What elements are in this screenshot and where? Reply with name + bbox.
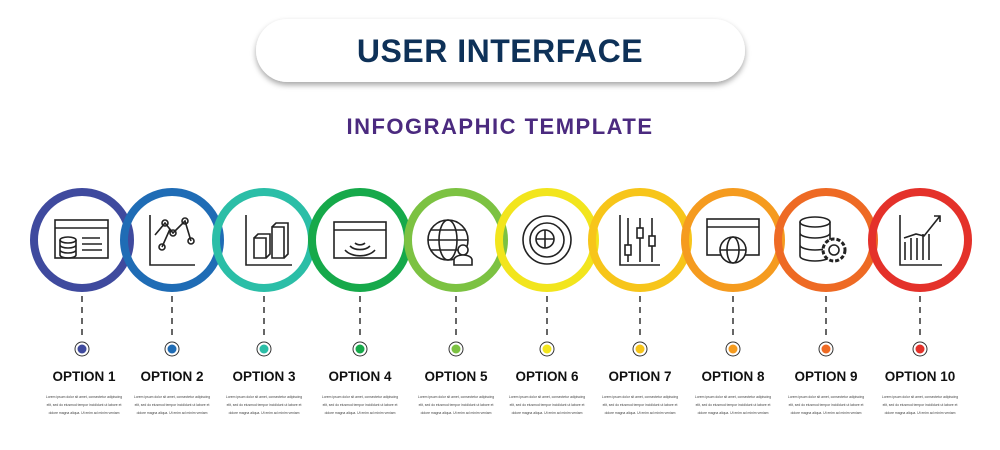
descriptions: dolore magna aliqua. Ut enim ad minim veniam <box>791 411 862 415</box>
icon: 3d bars <box>246 215 292 265</box>
descriptions: elit, sed do eiusmod tempor incididunt ut labore et <box>510 403 584 407</box>
descriptions: dolore magna aliqua. Ut enim ad minim veniam <box>229 411 300 415</box>
option labels <box>52 369 955 384</box>
descriptions: Lorem ipsum dolor sit amet, consectetur adipiscing <box>788 395 864 399</box>
connectors <box>82 296 920 338</box>
icon: browser database <box>55 220 108 258</box>
descriptions: dolore magna aliqua. Ut enim ad minim veniam <box>137 411 208 415</box>
descriptions: dolore magna aliqua. Ut enim ad minim veniam <box>605 411 676 415</box>
descriptions: dolore magna aliqua. Ut enim ad minim veniam <box>49 411 120 415</box>
option labels: OPTION 6 <box>515 369 579 384</box>
icons <box>55 215 942 265</box>
subtitle: INFOGRAPHIC TEMPLATE <box>346 114 654 139</box>
descriptions: elit, sed do eiusmod tempor incididunt ut labore et <box>419 403 493 407</box>
markers <box>75 342 927 356</box>
option labels: OPTION 7 <box>608 369 672 384</box>
icon: donut target <box>523 216 571 264</box>
option labels: OPTION 1 <box>52 369 116 384</box>
descriptions: elit, sed do eiusmod tempor incididunt ut labore et <box>696 403 770 407</box>
descriptions <box>46 395 958 415</box>
descriptions: elit, sed do eiusmod tempor incididunt ut labore et <box>323 403 397 407</box>
descriptions: Lorem ipsum dolor sit amet, consectetur adipiscing <box>46 395 122 399</box>
circles row <box>34 192 968 288</box>
descriptions: dolore magna aliqua. Ut enim ad minim veniam <box>325 411 396 415</box>
option labels: OPTION 9 <box>794 369 858 384</box>
icon: sliders <box>620 215 660 265</box>
descriptions: Lorem ipsum dolor sit amet, consectetur adipiscing <box>602 395 678 399</box>
descriptions: dolore magna aliqua. Ut enim ad minim veniam <box>512 411 583 415</box>
descriptions: Lorem ipsum dolor sit amet, consectetur adipiscing <box>418 395 494 399</box>
title pill <box>256 19 745 82</box>
descriptions: Lorem ipsum dolor sit amet, consectetur adipiscing <box>882 395 958 399</box>
descriptions: Lorem ipsum dolor sit amet, consectetur adipiscing <box>226 395 302 399</box>
icon: line chart <box>150 215 195 265</box>
option labels: OPTION 8 <box>701 369 765 384</box>
descriptions: elit, sed do eiusmod tempor incididunt ut labore et <box>603 403 677 407</box>
icon: database gear <box>800 217 845 261</box>
descriptions: dolore magna aliqua. Ut enim ad minim veniam <box>885 411 956 415</box>
option labels: OPTION 5 <box>424 369 488 384</box>
option labels: OPTION 4 <box>328 369 392 384</box>
descriptions: elit, sed do eiusmod tempor incididunt ut labore et <box>47 403 121 407</box>
option labels: OPTION 10 <box>885 369 955 384</box>
descriptions: elit, sed do eiusmod tempor incididunt ut labore et <box>883 403 957 407</box>
descriptions: Lorem ipsum dolor sit amet, consectetur adipiscing <box>509 395 585 399</box>
icon: globe user <box>428 220 472 265</box>
descriptions: elit, sed do eiusmod tempor incididunt ut labore et <box>789 403 863 407</box>
descriptions: Lorem ipsum dolor sit amet, consectetur adipiscing <box>322 395 398 399</box>
descriptions: Lorem ipsum dolor sit amet, consectetur adipiscing <box>695 395 771 399</box>
title pill: USER INTERFACE <box>357 33 643 69</box>
descriptions: dolore magna aliqua. Ut enim ad minim veniam <box>421 411 492 415</box>
descriptions: elit, sed do eiusmod tempor incididunt ut labore et <box>135 403 209 407</box>
icon: browser wifi <box>334 222 386 258</box>
descriptions: Lorem ipsum dolor sit amet, consectetur adipiscing <box>134 395 210 399</box>
option labels: OPTION 2 <box>140 369 204 384</box>
icon: browser globe <box>707 219 759 263</box>
descriptions: elit, sed do eiusmod tempor incididunt ut labore et <box>227 403 301 407</box>
option labels: OPTION 3 <box>232 369 296 384</box>
icon: growth chart <box>900 215 942 265</box>
descriptions: dolore magna aliqua. Ut enim ad minim veniam <box>698 411 769 415</box>
